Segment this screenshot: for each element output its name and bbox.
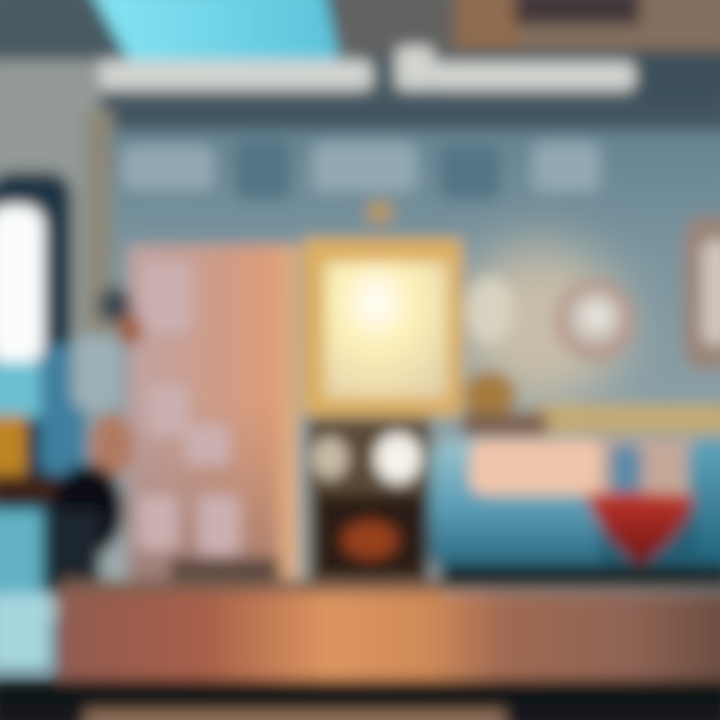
window water: [0, 362, 42, 418]
figure at left: [0, 287, 143, 595]
left wall: [0, 60, 100, 360]
sofa: [430, 440, 720, 580]
wall dark marks: [235, 140, 500, 200]
pale wall accent: [466, 276, 514, 344]
dark figure body: [52, 464, 124, 556]
left wall brown edge: [85, 110, 113, 350]
title band (illegible blurred lettering): [72, 46, 635, 90]
cabinet white vases: [312, 437, 348, 479]
window frame: [0, 172, 72, 592]
wooden floor: [58, 592, 720, 682]
picture top knob: [366, 200, 394, 224]
panel lighter blocks: [138, 262, 240, 555]
fire: [342, 521, 398, 559]
framed art at right edge: [684, 215, 720, 370]
sofa body: [430, 440, 615, 575]
shelf left dark end: [462, 412, 547, 436]
panel base shadow: [170, 558, 280, 582]
skylight: [90, 0, 342, 72]
baseboard: [60, 580, 440, 594]
brown band: [0, 476, 90, 502]
plant: [464, 371, 516, 419]
figure shoulder: [72, 335, 120, 410]
figure coat: [40, 345, 86, 475]
tan shelf: [535, 405, 720, 433]
picture canvas: [325, 262, 447, 398]
ceiling beam: [95, 100, 720, 130]
figure arm: [90, 413, 134, 477]
bottom strip: [0, 705, 720, 720]
wall background: [0, 100, 720, 620]
cabinet hearth: [316, 494, 426, 578]
dark foreground ledge: [0, 680, 720, 707]
lit framed picture: [302, 200, 462, 416]
pink cushion: [470, 440, 605, 495]
red heart cushion: [585, 492, 695, 566]
figure head: [98, 287, 132, 323]
window lower pane: [0, 510, 42, 594]
bottom left pale panel: [0, 594, 50, 670]
dark figure legs: [50, 510, 100, 595]
wall lettering (illegible blurred marks): [122, 142, 600, 192]
round wall decor: [555, 280, 635, 360]
window: [0, 172, 72, 594]
picture frame: [302, 238, 462, 416]
fireplace cabinet: [308, 418, 430, 583]
pink door panel: [128, 245, 298, 590]
lower sofa blue: [600, 500, 695, 575]
window sky: [0, 205, 44, 365]
floor shadow band: [440, 565, 720, 589]
blue cushion: [610, 445, 642, 495]
figure face: [117, 315, 143, 345]
right sofa: [688, 440, 720, 580]
warm wall patch: [455, 245, 625, 405]
ceiling: [0, 0, 720, 110]
window orange strip: [0, 415, 26, 475]
pale backrest: [600, 440, 695, 500]
